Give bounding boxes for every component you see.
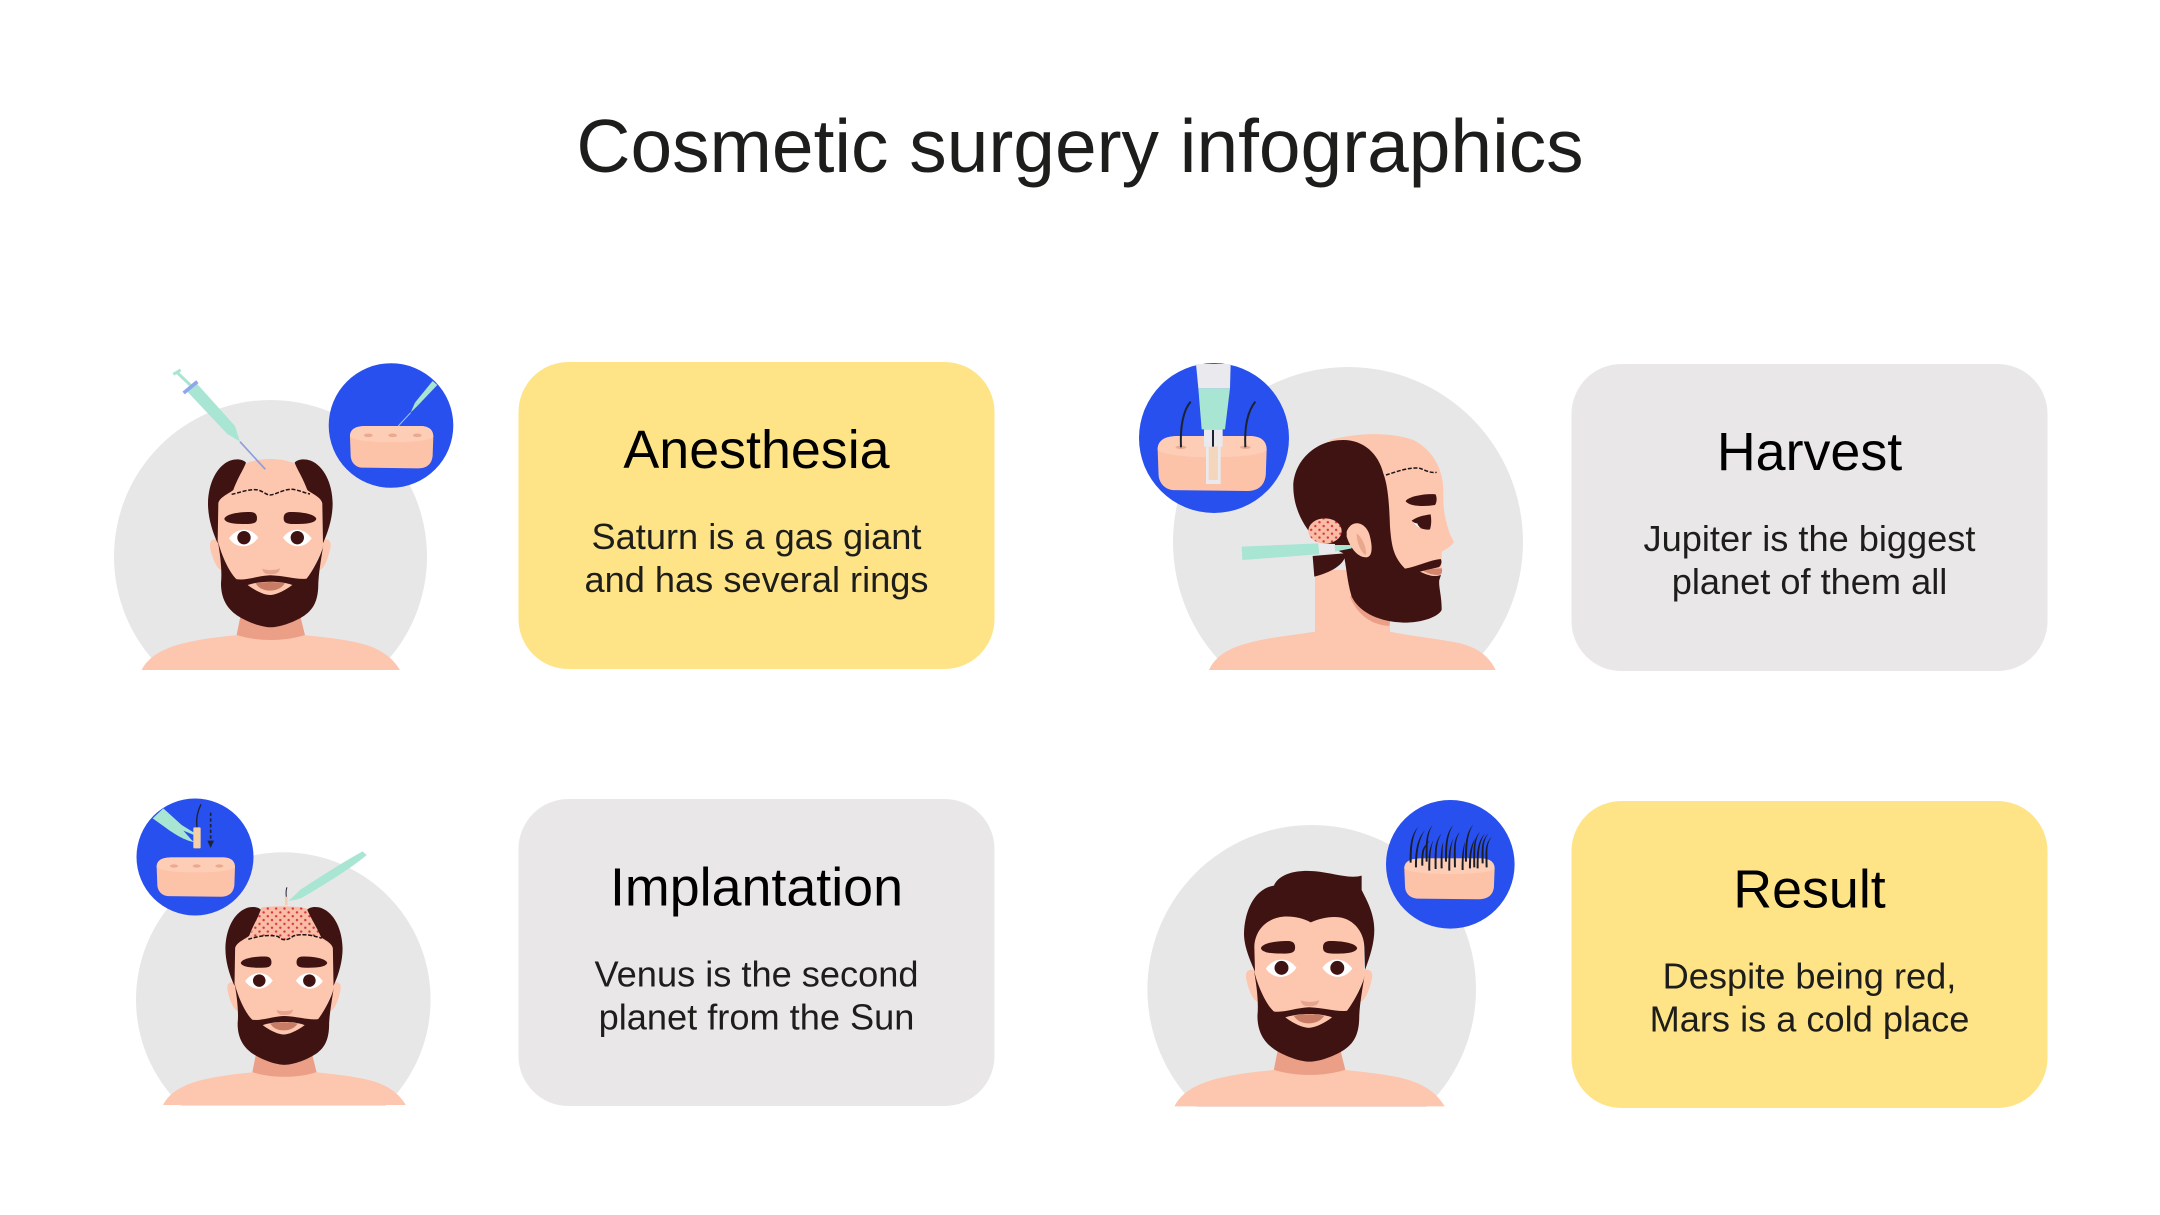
donor area dots: [1308, 518, 1342, 544]
card: Anesthesia: [518, 362, 994, 669]
card: Implantation: [518, 799, 994, 1106]
inset: blue circle with follicle extraction: [1139, 363, 1289, 513]
panel: harvest illustration: [1139, 363, 1523, 670]
description: Despite being red,: [1663, 956, 1956, 997]
panel: implantation illustration: [136, 798, 430, 1106]
heading: Harvest: [1717, 422, 1902, 482]
recipient area dots: [248, 906, 322, 940]
background circle: [136, 852, 430, 1106]
background circle: [1173, 367, 1523, 658]
icon: extraction tool: [1242, 543, 1352, 560]
portrait: bald front view: [142, 459, 400, 670]
description: planet from the Sun: [599, 997, 914, 1038]
title: Cosmetic surgery infographics: [576, 104, 1584, 188]
description: Venus is the second: [595, 954, 918, 995]
icon: syringe: [173, 370, 265, 469]
background circle: [1148, 825, 1476, 1107]
background circle: [114, 400, 427, 658]
panel: result illustration: [1148, 800, 1515, 1107]
card: Result: [1572, 801, 2048, 1108]
portrait: bald with prepared scalp: [163, 907, 406, 1105]
portrait: full hair: [1174, 916, 1444, 1106]
inset: blue circle with skin block: [329, 363, 453, 488]
heading: Result: [1733, 860, 1886, 920]
restored hair: [1244, 871, 1374, 972]
inset: blue circle with graft placement: [136, 798, 254, 916]
description: and has several rings: [585, 559, 928, 600]
card: Harvest: [1572, 364, 2048, 671]
heading: Anesthesia: [623, 420, 890, 480]
description: Jupiter is the biggest: [1644, 518, 1975, 559]
icon: tweezers with graft: [285, 851, 367, 905]
panel: anesthesia illustration: [114, 363, 454, 670]
description: planet of them all: [1672, 561, 1947, 602]
portrait: side view: [1209, 434, 1496, 670]
heading: Implantation: [610, 858, 903, 918]
description: Mars is a cold place: [1650, 999, 1969, 1040]
inset: blue circle with grown hair: [1386, 800, 1515, 929]
description: Saturn is a gas giant: [592, 516, 921, 557]
